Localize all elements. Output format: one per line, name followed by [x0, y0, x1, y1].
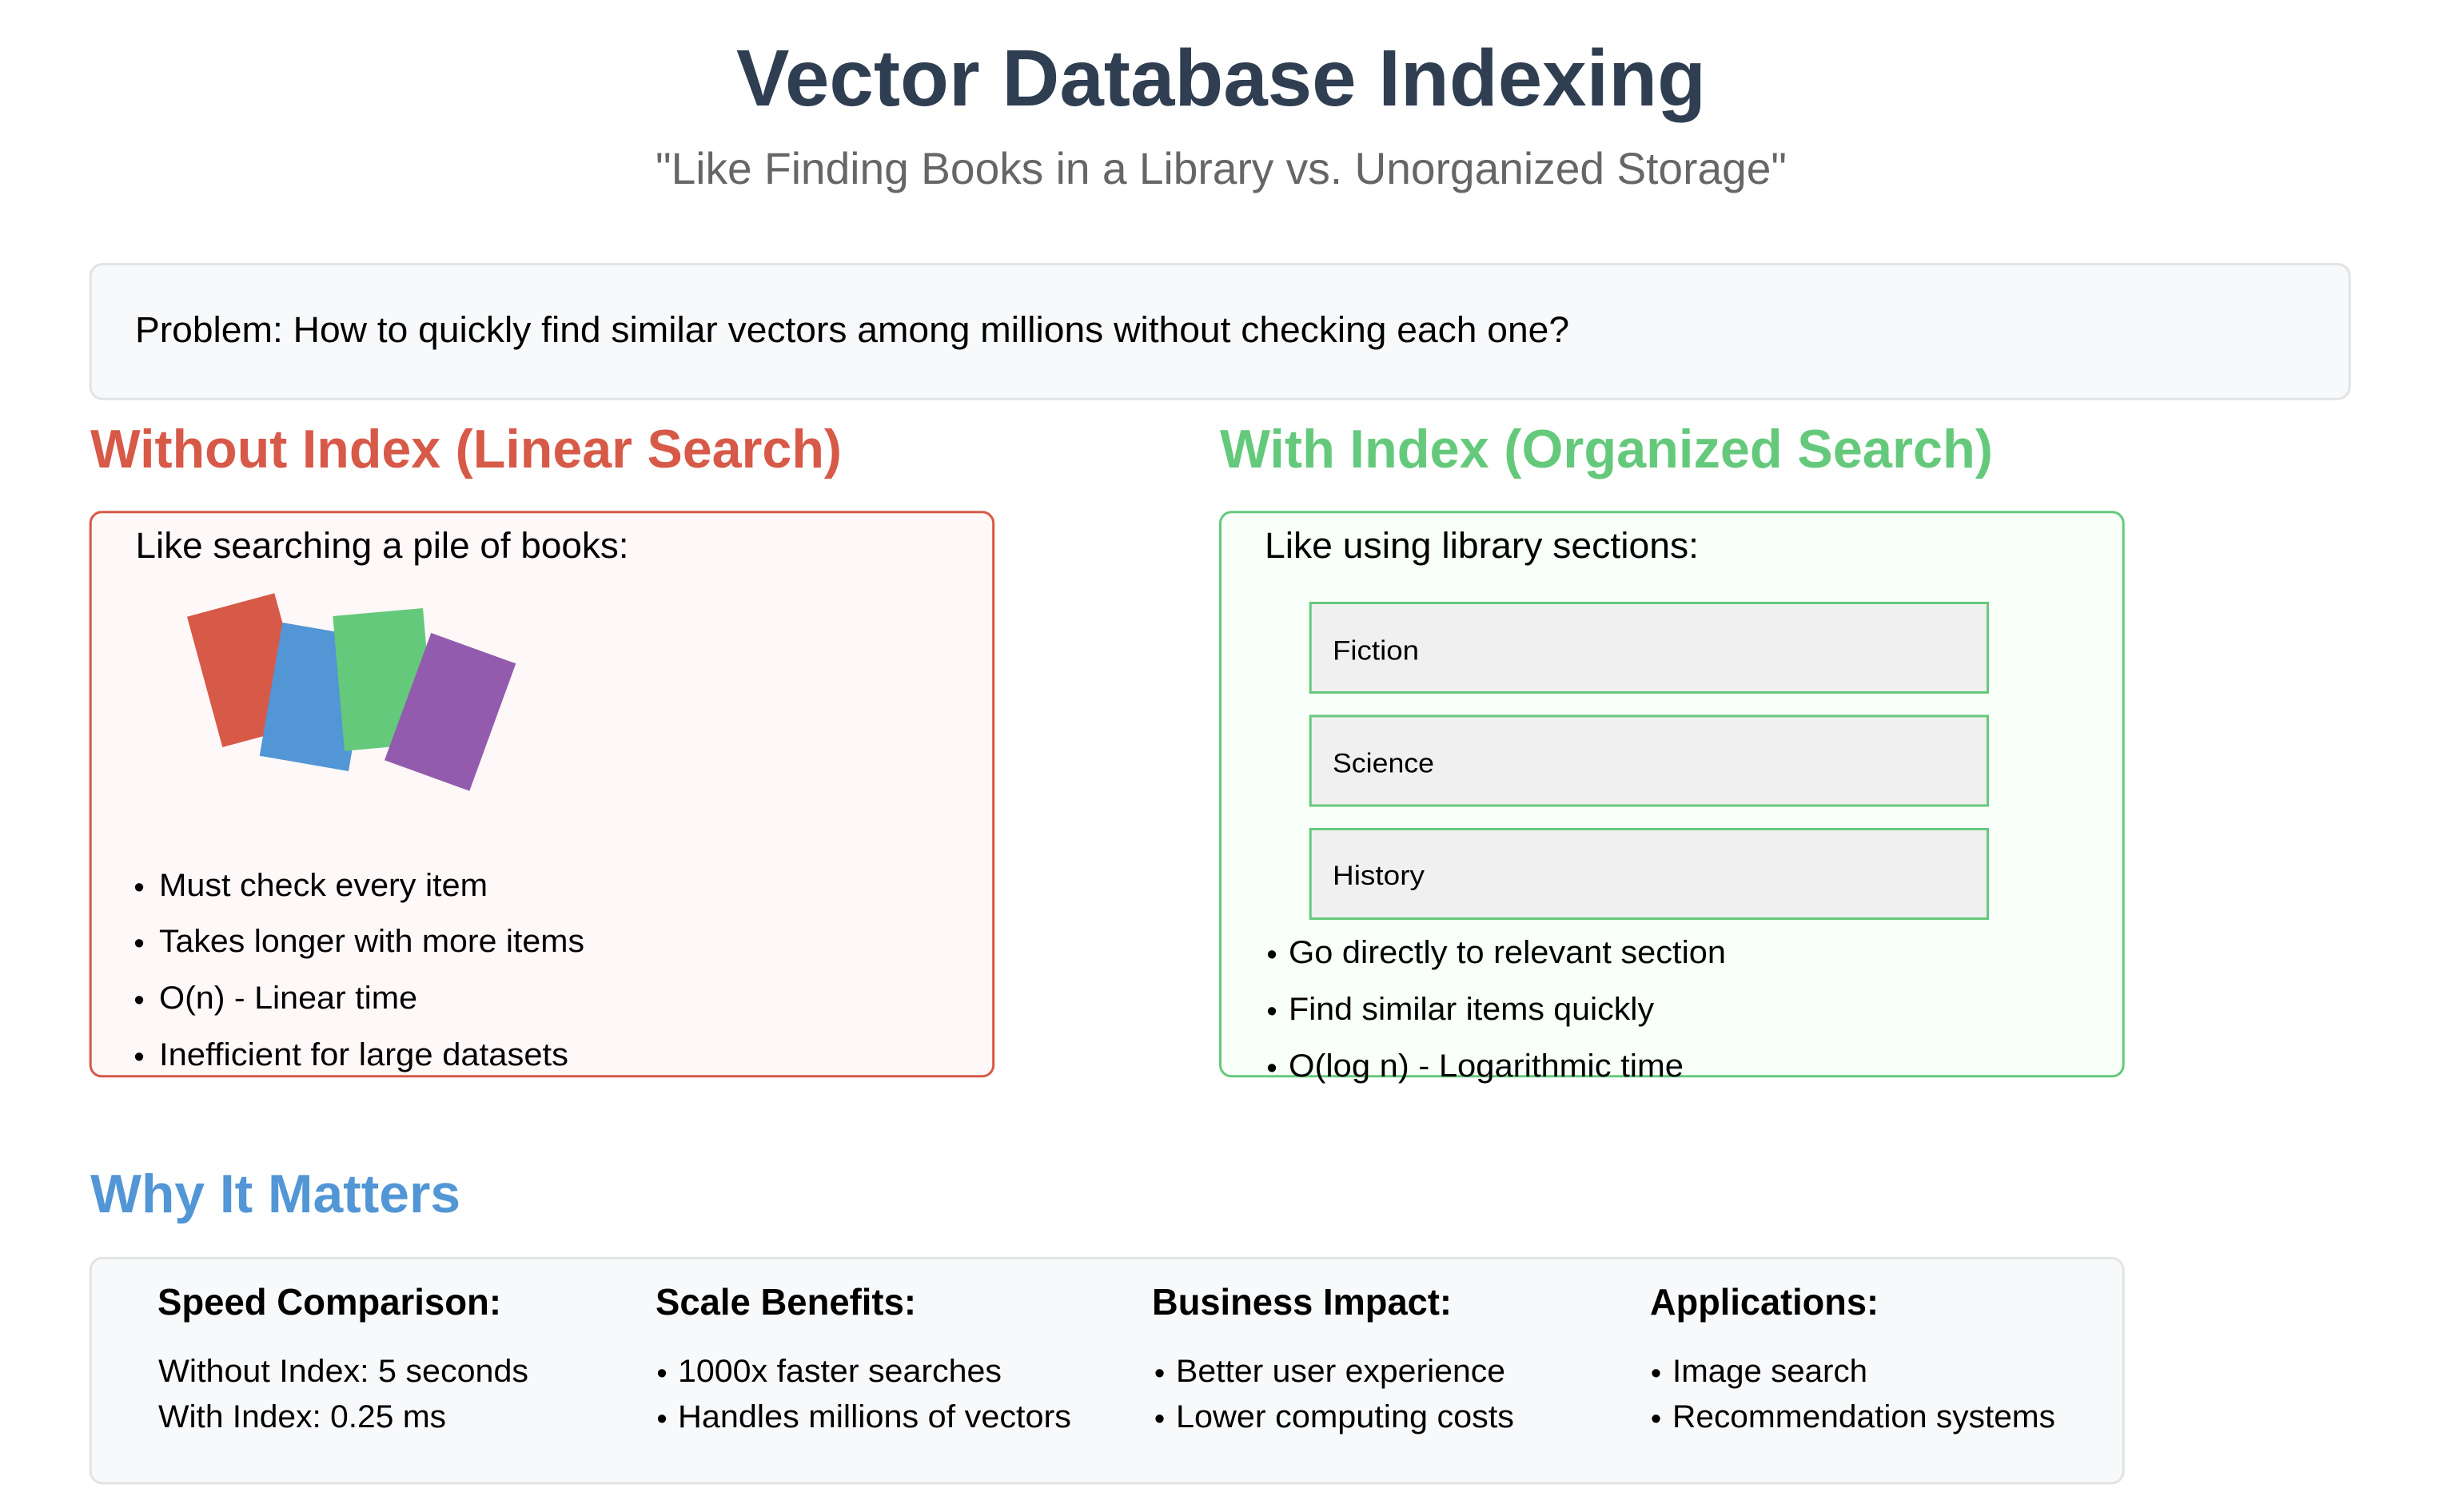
- bullet list: indexed search benefits: •: [1266, 995, 1277, 1029]
- column: speed comparison: Speed Comparison:: [157, 1281, 501, 1323]
- column: applications: Applications:: [1650, 1281, 1879, 1323]
- icon: pile of books: [187, 593, 516, 791]
- problem text: Problem: How to quickly find similar vectors among millions without checking each one?: [135, 309, 1569, 350]
- column: speed comparison: With Index: 0.25 ms: [158, 1399, 446, 1434]
- column: scale benefits: •: [656, 1357, 668, 1391]
- library section: science: [1310, 716, 1987, 806]
- bullet list: linear search drawbacks: O(n) - Linear time: [159, 981, 417, 1016]
- column: scale benefits: •: [656, 1403, 668, 1436]
- panel: why it matters: [90, 1258, 2123, 1483]
- bullet list: linear search drawbacks: •: [134, 871, 145, 905]
- heading: without index: Without Index (Linear Search): [90, 419, 842, 479]
- bullet list: linear search drawbacks: Must check every item: [159, 868, 488, 903]
- bullet list: linear search drawbacks: •: [134, 927, 145, 961]
- heading: why it matters: Why It Matters: [90, 1164, 460, 1224]
- bullet list: linear search drawbacks: Inefficient for large datasets: [159, 1037, 568, 1072]
- heading: with index: With Index (Organized Search): [1220, 419, 1993, 479]
- bullet list: linear search drawbacks: [134, 868, 584, 1074]
- column: scale benefits: Handles millions of vectors: [678, 1399, 1071, 1434]
- column: speed comparison: [157, 1281, 528, 1434]
- bullet list: indexed search benefits: Go directly to relevant section: [1289, 935, 1726, 970]
- bullet list: indexed search benefits: [1266, 935, 1726, 1085]
- bullet list: linear search drawbacks: •: [134, 1040, 145, 1074]
- library section: fiction: Fiction: [1333, 636, 1419, 666]
- panel: without index: [90, 512, 994, 1076]
- bullet list: indexed search benefits: •: [1266, 1052, 1277, 1085]
- column: scale benefits: [656, 1281, 1071, 1436]
- column: applications: •: [1651, 1403, 1661, 1436]
- column: applications: [1650, 1281, 2055, 1436]
- column: business impact: Business Impact:: [1152, 1281, 1452, 1323]
- column: business impact: •: [1154, 1403, 1165, 1436]
- subtitle: "Like Finding Books in a Library vs. Unorganized Storage": [656, 143, 1787, 193]
- panel: with index: [1220, 512, 2123, 1085]
- bullet list: indexed search benefits: O(log n) - Logarithmic time: [1289, 1048, 1684, 1084]
- bullet list: linear search drawbacks: •: [134, 984, 145, 1017]
- bullet list: linear search drawbacks: Takes longer with more items: [159, 924, 584, 959]
- column: scale benefits: 1000x faster searches: [678, 1354, 1002, 1389]
- column: business impact: Better user experience: [1176, 1354, 1505, 1389]
- library section: fiction: [1310, 603, 1987, 692]
- library section: science: Science: [1333, 748, 1434, 778]
- column: applications: Image search: [1672, 1354, 1867, 1389]
- library section: history: [1310, 830, 1987, 919]
- bullet list: indexed search benefits: Find similar items quickly: [1289, 992, 1654, 1027]
- panel intro text: Like searching a pile of books:: [136, 525, 628, 566]
- panel intro text: Like using library sections:: [1265, 525, 1699, 566]
- bullet list: indexed search benefits: •: [1266, 938, 1277, 972]
- column: applications: Recommendation systems: [1672, 1399, 2055, 1434]
- library section: history: History: [1333, 861, 1425, 891]
- title: Vector Database Indexing: [736, 34, 1706, 123]
- column: business impact: Lower computing costs: [1176, 1399, 1514, 1434]
- column: speed comparison: Without Index: 5 seconds: [158, 1354, 528, 1389]
- column: scale benefits: Scale Benefits:: [656, 1281, 916, 1323]
- column: business impact: [1152, 1281, 1514, 1436]
- column: business impact: •: [1154, 1357, 1165, 1391]
- column: applications: •: [1651, 1357, 1661, 1391]
- panel: problem statement: [90, 264, 2349, 399]
